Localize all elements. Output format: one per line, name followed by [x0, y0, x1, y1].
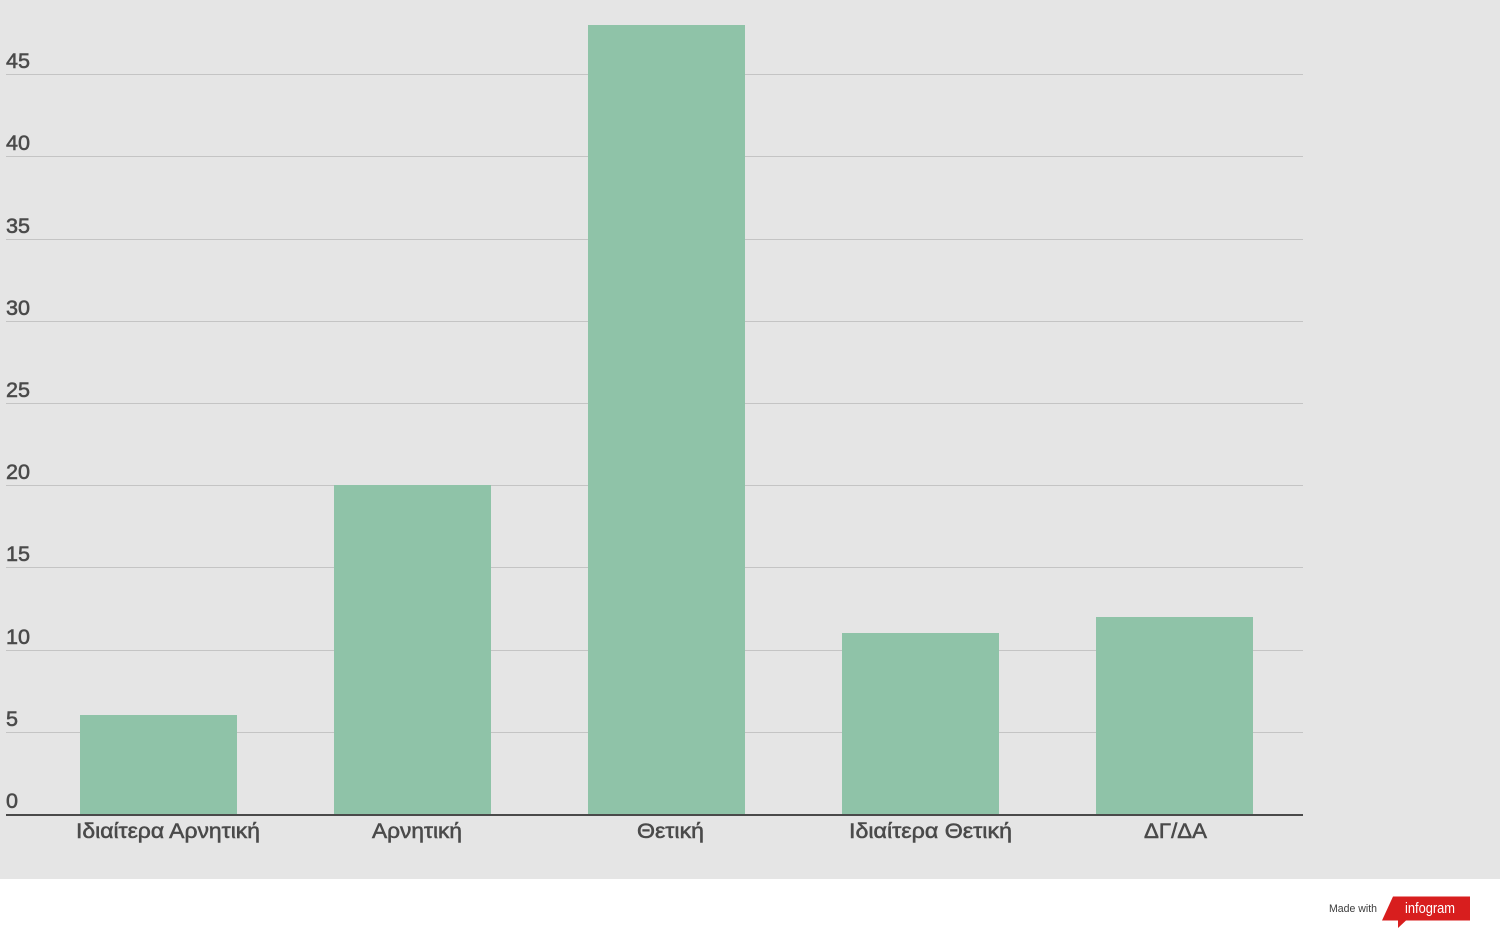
x axis labels: Ιδιαίτερα Αρνητική	[76, 820, 260, 843]
y axis labels: 35	[6, 215, 30, 238]
x axis line	[6, 814, 1303, 816]
made with text: Made with	[1329, 903, 1377, 915]
icon: infogram red speech flag	[1382, 896, 1470, 928]
y axis labels: 25	[6, 379, 30, 402]
y axis labels: 10	[6, 626, 30, 649]
y axis labels: 40	[6, 132, 30, 155]
bar: Ιδιαίτερα Θετική	[842, 633, 999, 814]
y axis labels: 45	[6, 50, 30, 73]
infogram wordmark: infogram	[1405, 900, 1455, 917]
x axis labels: ΔΓ/ΔΑ	[1144, 820, 1207, 843]
attribution: Made with infogram	[1329, 896, 1470, 928]
x axis labels: Αρνητική	[372, 820, 462, 843]
x axis labels	[76, 820, 1207, 843]
y axis labels: 15	[6, 543, 30, 566]
y axis labels: 5	[6, 708, 18, 731]
y axis labels	[6, 50, 30, 813]
bar: Αρνητική	[334, 485, 491, 814]
bars	[80, 25, 1253, 814]
x axis labels: Ιδιαίτερα Θετική	[849, 820, 1012, 843]
y axis labels: 20	[6, 461, 30, 484]
bar: ΔΓ/ΔΑ	[1096, 617, 1253, 814]
y axis labels: 0	[6, 790, 18, 813]
bar: Ιδιαίτερα Αρνητική	[80, 715, 237, 814]
y axis labels: 30	[6, 297, 30, 320]
bar: Θετική	[588, 25, 745, 814]
x axis labels: Θετική	[637, 820, 704, 843]
